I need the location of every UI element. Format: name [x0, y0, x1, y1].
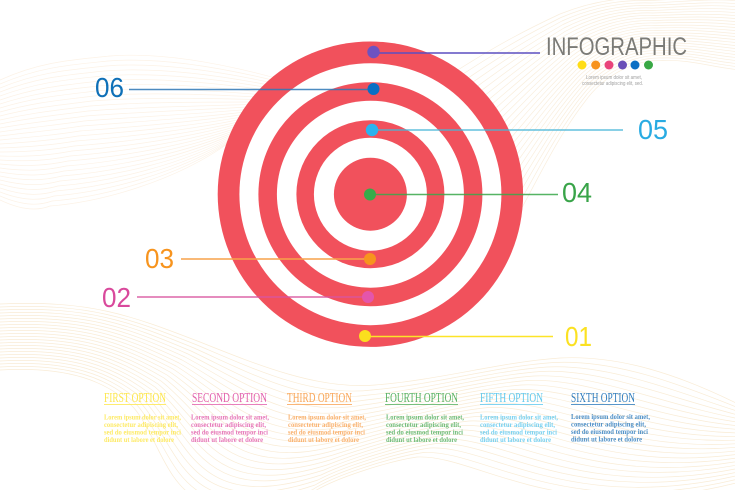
- callout 01: 01: [565, 321, 592, 352]
- option 2: consectetur adipiscing elit,: [191, 420, 266, 429]
- option 3: sed do eiusmod tempor inci: [288, 428, 365, 436]
- callout 03: [145, 243, 376, 274]
- option 4: [385, 390, 464, 444]
- option 2: Lorem ipsum dolor sit amet,: [191, 412, 269, 422]
- option 5: sed do eiusmod tempor inci: [480, 428, 557, 436]
- callout 01: [359, 321, 592, 352]
- option 3: [287, 390, 366, 444]
- callout 03: 03: [145, 243, 174, 274]
- option 6: consectetur adipiscing elit,: [571, 419, 646, 428]
- option 5: [480, 390, 558, 444]
- callout 02: [102, 282, 374, 313]
- option 1: Lorem ipsum dolor sit amet,: [104, 412, 181, 422]
- option 1: FIRST OPTION: [104, 390, 166, 405]
- option 2: sed do eiusmod tempor inci: [191, 428, 268, 436]
- option 3: didunt ut labore et dolore: [288, 435, 360, 444]
- callout 04: [364, 177, 592, 208]
- option 5: didunt ut labore et dolore: [480, 435, 552, 444]
- callout 05: 05: [638, 114, 668, 145]
- option 4: Lorem ipsum dolor sit amet,: [386, 412, 464, 422]
- option 5: FIFTH OPTION: [480, 390, 543, 405]
- option 3: Lorem ipsum dolor sit amet,: [288, 412, 366, 422]
- callout 04: 04: [562, 177, 592, 208]
- option 6: [571, 390, 650, 443]
- title block: [546, 33, 687, 87]
- title caption: [582, 75, 643, 87]
- option 4: consectetur adipiscing elit,: [386, 420, 461, 429]
- option 6: sed do eiusmod tempor inci: [571, 427, 648, 436]
- option 4: FOURTH OPTION: [385, 390, 458, 405]
- title text: INFOGRAPHIC: [546, 33, 687, 61]
- callout 05: [366, 114, 668, 145]
- option 4: didunt ut labore et dolore: [386, 435, 458, 444]
- option 2: SECOND OPTION: [192, 390, 267, 405]
- option 6: SIXTH OPTION: [571, 390, 635, 405]
- option 5: Lorem ipsum dolor sit amet,: [480, 412, 558, 422]
- callout 06: [95, 72, 380, 103]
- title caption: consectetur adipiscing elit, sed.: [582, 81, 643, 87]
- option 4: sed do eiusmod tempor inci: [386, 428, 463, 436]
- option 2: didunt ut labore et dolore: [191, 435, 264, 444]
- target: concentric red rings: [218, 42, 523, 347]
- option 1: [104, 390, 181, 444]
- option 3: THIRD OPTION: [287, 390, 352, 405]
- option 1: sed do eiusmod tempor inci: [104, 428, 181, 436]
- option 5: consectetur adipiscing elit,: [480, 420, 555, 429]
- title caption: Lorem ipsum dolor sit amet,: [586, 75, 642, 81]
- option 2: [191, 390, 269, 444]
- purple dot and leader to title: [367, 46, 540, 58]
- option 1: consectetur adipiscing elit,: [104, 420, 178, 429]
- option 6: didunt ut labore et dolore: [571, 434, 643, 443]
- colour dot row: [578, 60, 653, 70]
- callout 06: 06: [95, 72, 124, 103]
- option 1: didunt ut labore et dolore: [104, 435, 175, 444]
- callout 02: 02: [102, 282, 131, 313]
- option 3: consectetur adipiscing elit,: [288, 420, 363, 429]
- option 6: Lorem ipsum dolor sit amet,: [571, 412, 650, 421]
